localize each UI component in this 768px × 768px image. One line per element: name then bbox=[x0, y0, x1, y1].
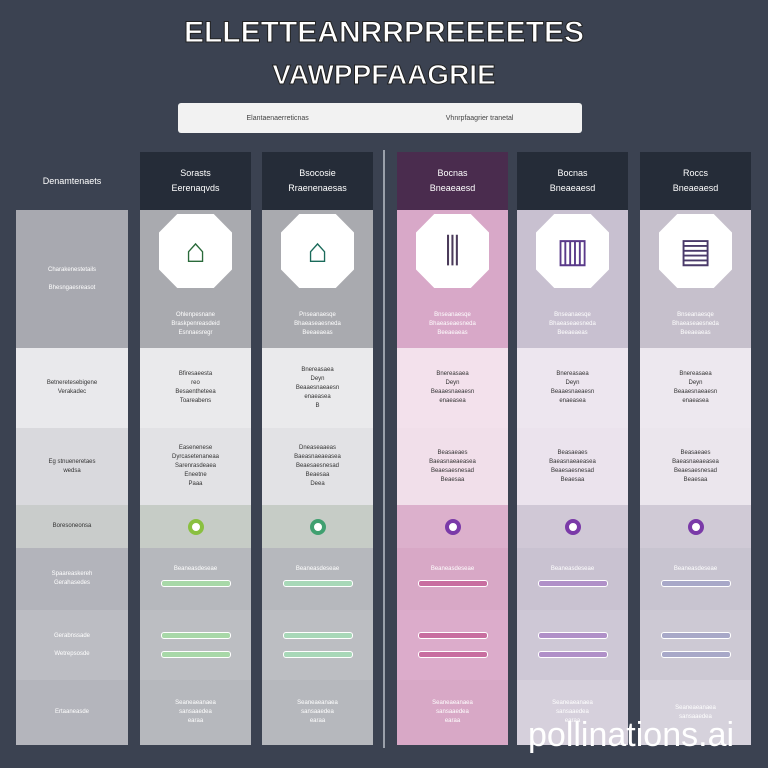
column 2 teal: B bbox=[315, 402, 320, 408]
column 2 teal: Bsocosie bbox=[299, 168, 336, 178]
column 3 pink: Seaneaeanaea bbox=[432, 700, 473, 706]
title: ELLETTEANRRPREEEETES bbox=[184, 16, 584, 49]
column 2 teal: Beaneasdeseae bbox=[296, 566, 339, 572]
column 3 pink: Beaesaesnesad bbox=[431, 468, 474, 474]
label column: Gerabnssade bbox=[54, 632, 90, 638]
title bbox=[184, 16, 584, 90]
column 1 green: Seaneaeanaea bbox=[175, 700, 216, 706]
column 2 teal: Deea bbox=[310, 481, 325, 487]
watermark: pollinations.ai bbox=[528, 716, 734, 754]
icon: green building: ⌂ bbox=[185, 232, 206, 270]
column 4 purple: Bhaeaseaesneda bbox=[549, 321, 596, 327]
column 4 purple: enaeasea bbox=[559, 398, 586, 404]
column 1 green: sansaaedea bbox=[179, 709, 212, 715]
column 4 purple bbox=[517, 152, 628, 745]
column 2 teal bbox=[262, 152, 373, 745]
column 2 teal: Bnereasaea bbox=[301, 366, 334, 372]
label column: Bhesngaesreasot bbox=[49, 284, 95, 290]
column 3 pink: Deyn bbox=[445, 380, 460, 386]
column 3 pink: Beaaesnaeaesn bbox=[431, 389, 474, 395]
column 4 purple: Beaesaesnesad bbox=[551, 468, 594, 474]
label column: Ertaaneasde bbox=[55, 709, 89, 715]
column 2 teal: earaa bbox=[310, 718, 325, 724]
column 1 green: Braskpenreasdeid bbox=[171, 321, 220, 327]
divider bbox=[383, 150, 385, 748]
column 3 pink: Beasaeaes bbox=[437, 450, 468, 456]
icon: purple book bbox=[536, 214, 609, 288]
column 2 teal: Seaneaeanaea bbox=[297, 700, 338, 706]
subtitle bar: Vhnrpfaagrier tranetal bbox=[446, 114, 513, 122]
column 2 teal: enaeasea bbox=[304, 394, 331, 400]
column 2 teal: Pnseanaesqe bbox=[299, 312, 336, 318]
column 1 green: reo bbox=[191, 380, 200, 386]
column 1 green: Sarenrasdeaea bbox=[175, 463, 216, 469]
column 4 purple: Seaneaeanaea bbox=[552, 700, 593, 706]
column 1 green: Toareabens bbox=[180, 398, 211, 404]
column 3 pink: earaa bbox=[445, 718, 460, 724]
column 4 purple: Deyn bbox=[565, 380, 580, 386]
column 4 purple: earaa bbox=[565, 718, 580, 724]
subtitle bar: Elantaenaerreticnas bbox=[246, 114, 309, 122]
subtitle bar bbox=[178, 103, 582, 133]
column 5 violet: sansaaedea bbox=[679, 714, 712, 720]
column 1 green: Paaa bbox=[188, 481, 202, 487]
column 3 pink: Beaesaa bbox=[441, 476, 464, 482]
column 1 green: Esnnaesregr bbox=[178, 330, 213, 336]
column 5 violet: Deyn bbox=[688, 380, 702, 386]
column 2 teal: Bhaeaseaesneda bbox=[294, 321, 341, 327]
label column: Wetrepsosde bbox=[54, 650, 90, 656]
column 5 violet: Seaneaeanaea bbox=[675, 704, 716, 710]
column 3 pink: Bnereasaea bbox=[436, 371, 469, 377]
column 5 violet: Beasaeaes bbox=[680, 450, 711, 456]
label column: Charakenestetails bbox=[48, 266, 96, 272]
column 1 green: Dyrcasetenaneaa bbox=[172, 454, 219, 460]
column 4 purple: Beaaesnaeaesn bbox=[551, 389, 594, 395]
icon: pink chart: ⫼ bbox=[445, 232, 460, 270]
column 2 teal: Beaesaa bbox=[306, 472, 329, 478]
label column: Denamtenaets bbox=[43, 176, 101, 186]
column 3 pink: Bneaeaesd bbox=[430, 183, 475, 193]
column 4 purple: Bnseanaesqe bbox=[554, 312, 591, 318]
label column: Gerahasedes bbox=[54, 580, 90, 586]
column 1 green bbox=[140, 152, 251, 745]
column 5 violet: Baeasnaeaeasea bbox=[672, 458, 719, 464]
column 4 purple: Bnereasaea bbox=[556, 371, 589, 377]
column 4 purple: sansaaedea bbox=[556, 709, 589, 715]
column 2 teal: Beeaeaeas bbox=[302, 330, 333, 336]
column 2 teal: Rraenenaesas bbox=[288, 183, 347, 193]
column 3 pink: enaeasea bbox=[439, 398, 466, 404]
column 5 violet: Bnereasaea bbox=[679, 371, 712, 377]
column 1 green: Eneetne bbox=[184, 472, 207, 478]
column 2 teal: Deyn bbox=[310, 376, 324, 382]
column 4 purple: Baeasnaeaeasea bbox=[549, 458, 596, 464]
icon: teal building bbox=[281, 214, 354, 288]
column 3 pink bbox=[397, 152, 508, 745]
column 1 green: Ohlenpesnane bbox=[176, 312, 215, 318]
column 1 green: Bfiresaeesta bbox=[179, 371, 212, 377]
column 5 violet: Beeaeaeas bbox=[680, 330, 711, 336]
column 1 green: Beaneasdeseae bbox=[174, 566, 217, 572]
column 3 pink: Baeasnaeaeasea bbox=[429, 458, 476, 464]
column 5 violet: enaeasea bbox=[682, 398, 709, 404]
label column: Spaareaskereh bbox=[52, 571, 92, 577]
column 5 violet: Beaesaa bbox=[684, 476, 707, 482]
icon: purple book: ▥ bbox=[556, 232, 589, 270]
column 5 violet: Roccs bbox=[683, 168, 708, 178]
column 4 purple: Bocnas bbox=[557, 168, 588, 178]
label column: wedsa bbox=[63, 468, 81, 474]
icon: book: ▤ bbox=[679, 232, 712, 270]
label column: Boresoneonsa bbox=[53, 523, 91, 529]
column 5 violet: Bhaeaseaesneda bbox=[672, 321, 719, 327]
column 3 pink: sansaaedea bbox=[436, 709, 469, 715]
label column: Verakadec bbox=[58, 389, 86, 395]
column 2 teal: sansaaedea bbox=[301, 709, 334, 715]
column 3 pink: Bnseanaesqe bbox=[434, 312, 471, 318]
column 3 pink: Beeaeaeas bbox=[437, 330, 468, 336]
title: VAWPPFAAGRIE bbox=[272, 59, 496, 90]
column 4 purple: Beeaeaeas bbox=[557, 330, 588, 336]
column 2 teal: Baeasnaeaeasea bbox=[294, 454, 341, 460]
column 1 green: Sorasts bbox=[180, 168, 211, 178]
column 4 purple: Bneaeaesd bbox=[550, 183, 595, 193]
column 5 violet bbox=[640, 152, 751, 745]
column 4 purple: Beaneasdeseae bbox=[551, 566, 594, 572]
column 5 violet: Bneaeaesd bbox=[673, 183, 718, 193]
column 4 purple: Beasaeaes bbox=[557, 450, 588, 456]
label column: Eg stnueneretaes bbox=[48, 458, 96, 464]
column 4 purple: Beaesaa bbox=[561, 476, 584, 482]
column 1 green: Besaentheteea bbox=[175, 389, 216, 395]
icon: pink chart bbox=[416, 214, 489, 288]
icon: teal building: ⌂ bbox=[307, 232, 328, 270]
icon: green building bbox=[159, 214, 232, 288]
column 2 teal: Beaaesnaeaesn bbox=[296, 384, 339, 390]
column 5 violet: Beaaesnaeaesn bbox=[674, 389, 717, 395]
label column bbox=[16, 176, 128, 745]
column 1 green: Eerenaqvds bbox=[171, 183, 220, 193]
icon: book bbox=[659, 214, 732, 288]
column 3 pink: Bhaeaseaesneda bbox=[429, 321, 476, 327]
label column: Betneretesebigene bbox=[47, 380, 97, 386]
column 3 pink: Beaneasdeseae bbox=[431, 566, 474, 572]
column 5 violet: Beaneasdeseae bbox=[674, 566, 717, 572]
column 2 teal: Dneaseaaeas bbox=[299, 445, 336, 451]
column 2 teal: Beaesaesnesad bbox=[296, 463, 339, 469]
column 1 green: Easenenese bbox=[179, 445, 212, 451]
column 5 violet: Bnseanaesqe bbox=[677, 312, 714, 318]
column 5 violet: Beaesaesnesad bbox=[674, 468, 717, 474]
column 1 green: earaa bbox=[188, 718, 203, 724]
column 3 pink: Bocnas bbox=[437, 168, 468, 178]
